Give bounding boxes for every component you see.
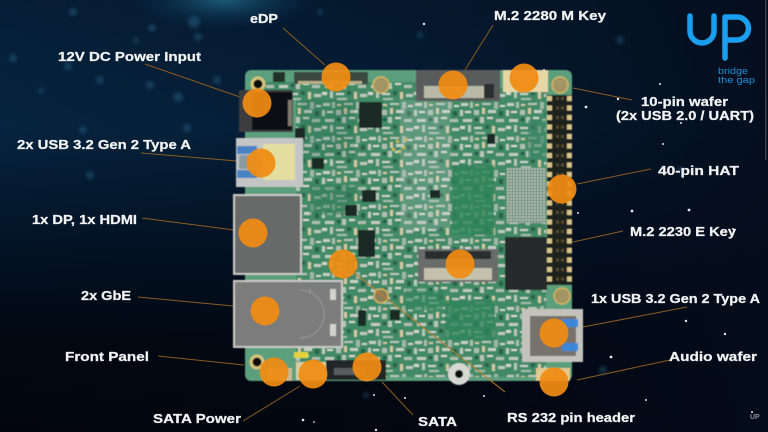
audio wafer xyxy=(536,368,570,381)
SATA connector xyxy=(326,360,386,380)
small top header xyxy=(273,72,285,82)
small corner logo: UP xyxy=(750,414,760,421)
labels: 10-pin wafer xyxy=(641,94,728,109)
memory chip area xyxy=(506,168,546,223)
labels: Front Panel xyxy=(65,349,149,364)
USB port left xyxy=(236,138,303,187)
power jack xyxy=(239,90,293,132)
labels: (2x USB 2.0 / UART) xyxy=(616,108,754,123)
labels: M.2 2230 E Key xyxy=(630,224,737,239)
leader lines xyxy=(138,25,687,421)
orange markers xyxy=(238,62,576,396)
40-pin header xyxy=(547,95,572,285)
USB port right xyxy=(522,309,583,362)
UP logo xyxy=(690,16,755,85)
labels: eDP xyxy=(250,11,278,26)
labels: 2x GbE xyxy=(81,288,131,303)
labels: 1x USB 3.2 Gen 2 Type A xyxy=(591,291,761,306)
labels: 1x DP, 1x HDMI xyxy=(32,212,137,227)
yellow jumper xyxy=(294,352,308,358)
labels: 12V DC Power Input xyxy=(58,49,202,64)
component field xyxy=(296,88,546,370)
top and bottom edge components xyxy=(262,82,536,377)
M.2 E key socket xyxy=(418,249,498,282)
dark copper and light component zones xyxy=(300,100,546,340)
UP logo: bridge xyxy=(718,66,748,76)
labels: 2x USB 3.2 Gen 2 Type A xyxy=(17,137,192,152)
10-pin wafer xyxy=(503,70,548,92)
labels: 40-pin HAT xyxy=(658,163,739,178)
M.2 M key socket xyxy=(416,70,500,101)
mounting holes xyxy=(251,77,570,385)
gold component dots xyxy=(392,138,408,153)
UP board xyxy=(234,70,583,385)
BGA chip xyxy=(505,237,547,290)
GbE connector xyxy=(234,281,342,347)
PCB xyxy=(245,70,572,381)
UP logo: the gap xyxy=(718,75,755,85)
front panel header xyxy=(268,368,292,381)
chips xyxy=(295,102,495,326)
labels: Audio wafer xyxy=(669,349,757,364)
SATA power header xyxy=(296,362,326,380)
labels: M.2 2280 M Key xyxy=(494,8,607,23)
RS 232 leader line xyxy=(343,264,505,392)
labels: RS 232 pin header xyxy=(507,410,635,425)
eDP connector xyxy=(294,72,368,84)
labels: SATA xyxy=(418,414,458,429)
DP HDMI connector xyxy=(234,195,301,274)
labels: SATA Power xyxy=(153,411,241,426)
